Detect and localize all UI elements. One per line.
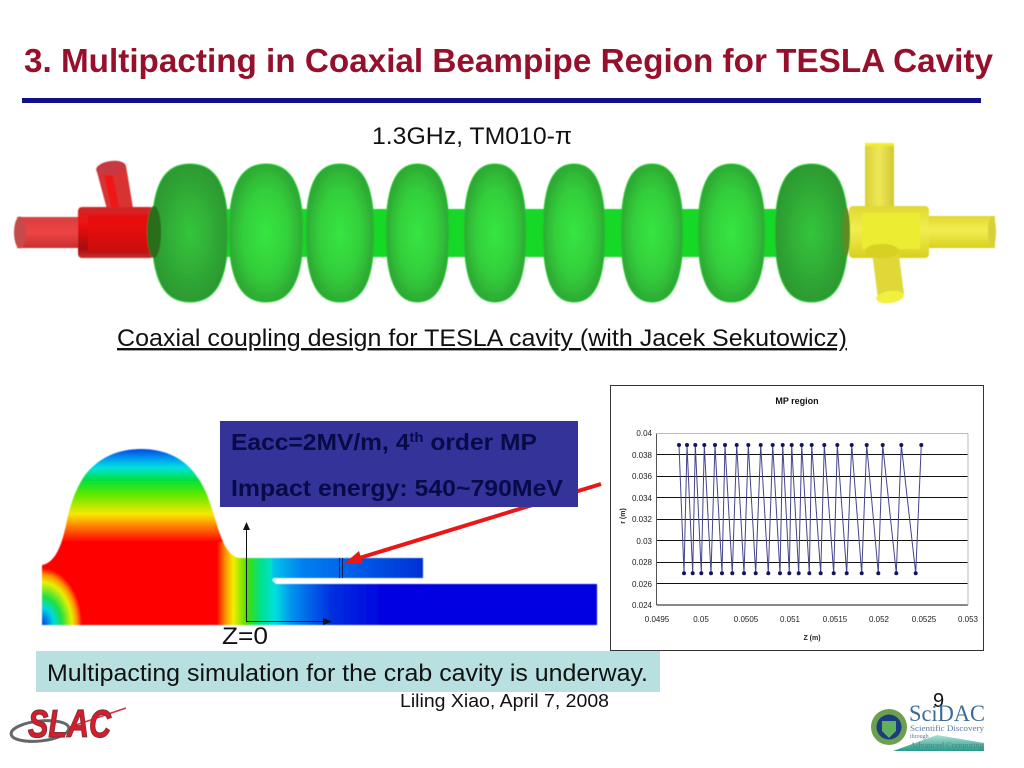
swoosh [10,718,70,744]
x axis labels [645,615,979,624]
right yellow coupler [849,143,996,305]
author and date: Liling Xiao, April 7, 2008 [400,691,609,711]
left red coupler [14,159,154,258]
SLAC wordmark: SLAC [28,703,112,746]
y axis labels: 0.034 [632,494,653,503]
field map simulation [41,448,598,626]
SciDAC tagline: Scientific Discovery [910,724,984,733]
y axis title: r (m) [620,508,627,524]
x axis title: Z (m) [803,635,821,642]
teal wedge [893,735,984,751]
x axis labels: 0.0495 [645,615,670,624]
DOE seal [871,709,907,745]
MP order text: th [409,430,424,446]
x axis labels: 0.052 [869,615,890,624]
Z axes [243,522,332,625]
x axis labels: 0.0505 [734,615,759,624]
y axis labels [632,429,653,610]
y axis labels: 0.04 [636,429,653,438]
MP order text: order MP [424,430,537,456]
y axis labels: 0.026 [632,580,653,589]
y axis labels: 0.028 [632,558,653,567]
y axis labels: 0.032 [632,515,653,524]
SciDAC logo [871,701,985,751]
MP location marks [340,558,342,578]
field colours [41,448,598,626]
y axis labels: 0.036 [632,472,653,481]
accelerating cells [152,164,848,302]
frequency label: 1.3GHz, TM010-π [372,123,572,150]
panel: MP region chart [610,386,984,650]
x axis labels: 0.0525 [912,615,937,624]
MP order text: Eacc=2MV/m, 4 [231,430,409,456]
top impact points [677,443,923,447]
cavity end openings [147,206,161,258]
Z=0 label: Z=0 [222,623,268,650]
chart title: MP region [775,396,819,406]
cavity caption: Coaxial coupling design for TESLA cavity (with Jacek Sekutowicz) [117,325,847,352]
SciDAC wordmark: SciDAC [909,701,985,726]
bottom impact points [682,571,918,575]
status text: Multipacting simulation for the crab cavity is underway. [47,660,648,687]
impact energy text: Impact energy: 540~790MeV [231,475,564,501]
page number: 9 [933,690,944,712]
MP parameters box [220,421,578,507]
x axis labels: 0.0515 [823,615,848,624]
y axis labels: 0.024 [632,601,653,610]
SLAC logo [10,703,126,746]
status callout [36,651,660,692]
electron trajectory [679,445,921,573]
beam pipe irises [190,209,810,257]
x axis labels: 0.051 [780,615,801,624]
arrow to MP location [345,484,601,564]
y axis labels: 0.03 [636,537,653,546]
title: 3. Multipacting in Coaxial Beampipe Region for TESLA Cavity [24,42,994,79]
y axis labels: 0.038 [632,451,653,460]
x axis labels: 0.05 [693,615,709,624]
through: through [910,734,929,740]
plot frame and grid [656,434,968,605]
TESLA cavity 3D model [14,143,996,305]
x axis labels: 0.053 [958,615,979,624]
advanced computing: Advanced Computing [910,741,984,750]
